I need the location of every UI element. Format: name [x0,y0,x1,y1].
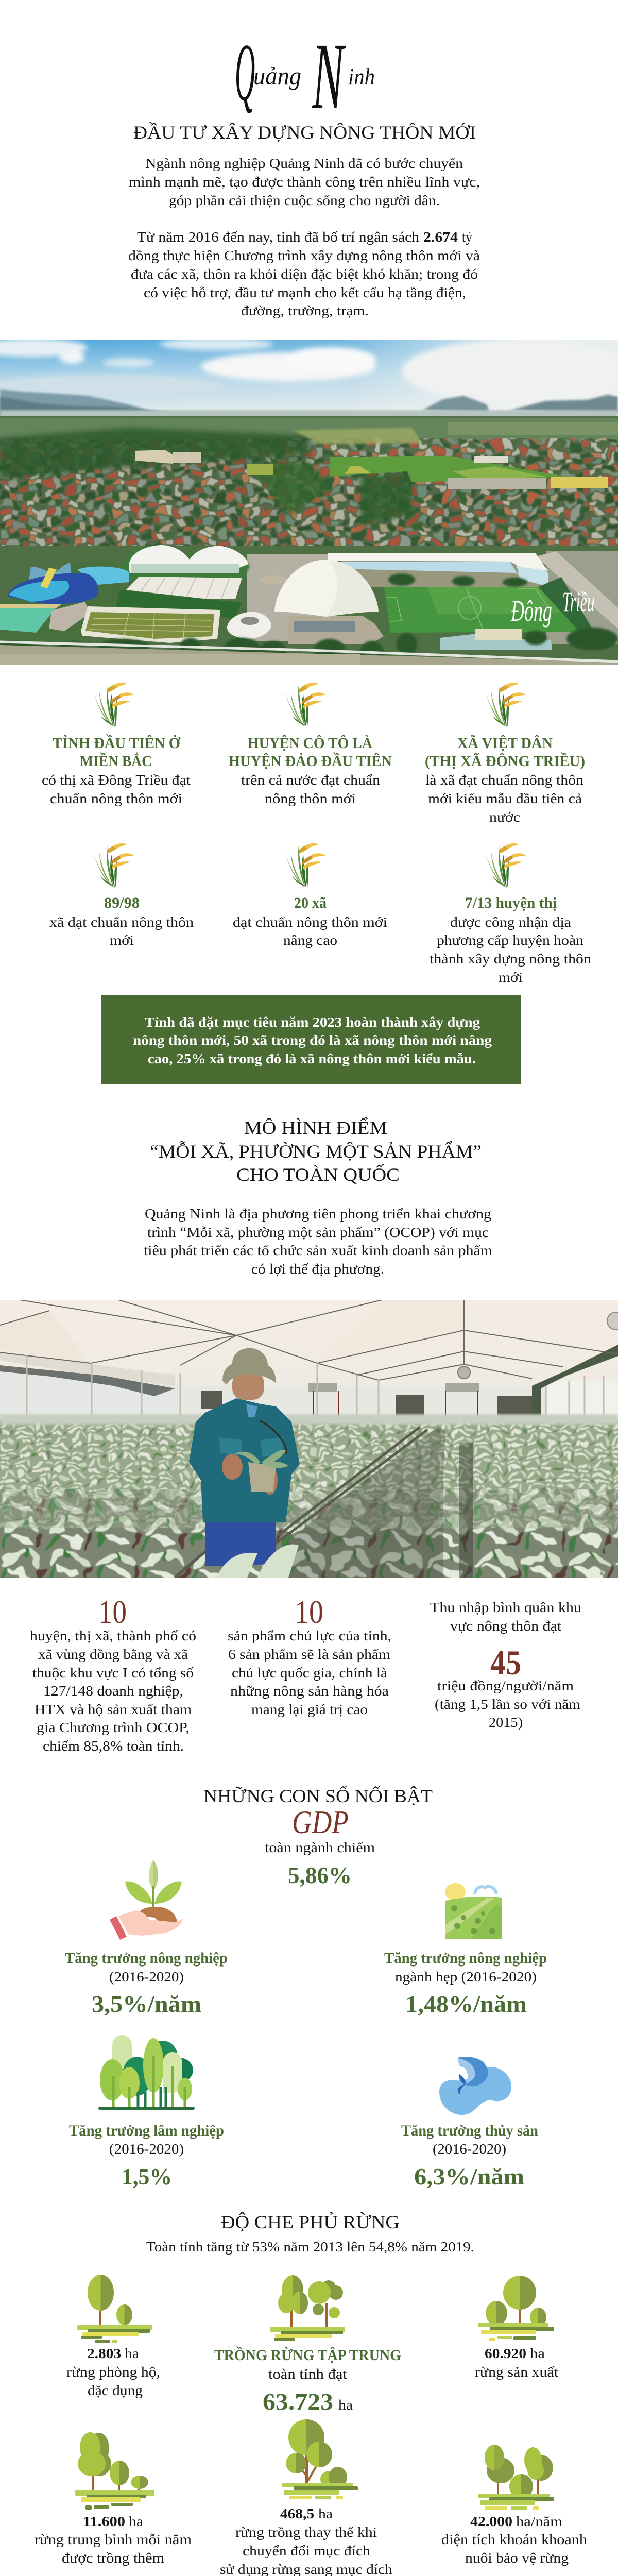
stat: 11.600 ha: được trồng thêm [62,2550,164,2566]
stat: rural income 45 million: triệu đồng/người/năm [437,1677,574,1693]
stat: 10 districts: huyện, thị xã, thành phố có [30,1628,196,1643]
stat: rural income 45 million: 2015) [489,1714,523,1730]
title signature: Quảng Ninh: inh [348,63,375,90]
stat: 20 communes: đạt chuẩn nông thôn mới [233,914,387,930]
callout: 2023 target: nông thôn mới, 50 xã trong đó là xã nông thôn mới nâng [133,1032,492,1048]
stat: rural income 45 million: 45 [490,1643,521,1682]
stat: GDP share: 5,86% [288,1862,352,1888]
intro text: góp phần cải thiện cuộc sống cho người dân. [169,192,440,208]
stat: 89/98 communes: xã đạt chuẩn nông thôn [49,914,194,930]
stat: narrow agriculture growth: ngành hẹp (2016-2020) [395,1969,537,1985]
stat: 63.723 ha: 63.723 [263,2389,333,2415]
heading: OCOP model: MÔ HÌNH ĐIỂM [244,1117,387,1138]
intro text: đồng thực hiện Chương trình xây dựng nông thôn mới và [128,247,480,263]
icon: plant in hand [110,1860,183,1940]
icon: rice stalk [285,683,325,727]
stat: rural income 45 million: vực nông thôn đạt [450,1618,561,1634]
icon: rice stalk [285,843,325,888]
icon: trees [75,2432,154,2510]
stat: narrow agriculture growth: Tăng trưởng nông nghiệp [384,1950,547,1967]
icon: trees [478,2445,554,2510]
stat: forestry growth: Tăng trưởng lâm nghiệp [69,2123,224,2139]
text: OCOP programme: trình “Mỗi xã, phường một sản phẩm” (OCOP) với mục [147,1224,489,1240]
stat: 60.920 ha: 60.920 [485,2345,526,2361]
stat: 10 districts: xã vùng đồng bằng và xã [38,1646,188,1662]
stat: rural income 45 million [430,1599,581,1730]
stat: 468,5 ha: ha [318,2505,333,2521]
title signature: Quảng Ninh: N [312,24,346,129]
achievement: Việt Dân commune: XÃ VIỆT DÂN [457,735,553,752]
stat: 11.600 ha [35,2513,192,2566]
stat: 10 key products: sản phẩm chủ lực của tỉnh, [228,1628,391,1643]
text: OCOP programme: tiêu phát triển các tổ chức sản xuất kinh doanh sản phẩm [144,1242,492,1258]
stat: 7/13 districts: được công nhận địa [450,914,571,930]
achievement: first northern province: có thị xã Đông Triều đạt [42,772,191,788]
callout: 2023 target: cao, 25% xã trong đó là xã nông thôn mới kiểu mẫu. [148,1050,476,1066]
stat: 10 districts: thuộc khu vực I có tổng số [32,1665,194,1681]
stat: 10 districts: chiếm 85,8% toàn tỉnh. [43,1738,184,1754]
text: OCOP programme [144,1206,492,1277]
stat: 7/13 districts: phương cấp huyện hoàn [437,932,583,948]
intro text [128,155,480,318]
stat: 11.600 ha: rừng trung bình mỗi năm [35,2531,192,2547]
stat: rural income 45 million: Thu nhập bình quân khu [430,1599,581,1615]
stat: forestry growth: (2016-2020) [109,2141,184,2157]
stat: agriculture growth: (2016-2020) [109,1969,184,1985]
heading: OCOP model: CHO TOÀN QUỐC [236,1164,400,1185]
stat: fishery growth: Tăng trưởng thủy sản [401,2123,538,2139]
stat: 468,5 ha: chuyển đổi mục đích [243,2543,370,2558]
intro text: tỷ [462,229,472,245]
panel: agriculture growth [65,1860,228,2017]
stat: GDP share [265,1804,375,1888]
stat: forestry growth [69,2123,224,2190]
title signature: Quảng Ninh: uảng [253,61,301,90]
stat: 63.723 ha: TRỒNG RỪNG TẬP TRUNG [214,2346,401,2364]
achievement: Cô Tô district: HUYỆN CÔ TÔ LÀ [248,735,373,752]
icon: trees [270,2275,345,2341]
achievement: Cô Tô district [229,735,392,806]
panel: protection forest [66,2275,160,2398]
stat: 10 key products: những nông sản hàng hóa [230,1683,389,1699]
stat: 42.000 ha/năm [441,2513,587,2566]
icon: fish in pond [439,2057,511,2115]
icon: rice stalk [485,843,526,888]
stat: GDP share: GDP [292,1804,349,1840]
stat: 63.723 ha [214,2346,401,2415]
panel: fishery growth [401,2057,538,2190]
stat: agriculture growth: 3,5%/năm [92,1991,201,2017]
stat: 11.600 ha: 11.600 [83,2513,125,2529]
stat: 468,5 ha: rừng trồng thay thế khi [235,2524,377,2540]
text: OCOP programme: có lợi thế địa phương. [251,1261,384,1277]
stat: 7/13 districts: mới [499,969,523,985]
intro text: đường, trường, trạm. [241,302,369,318]
title signature: Quảng Ninh [235,24,375,129]
stat: 10 districts: gia Chương trình OCOP, [37,1719,190,1735]
panel: OCOP key figures [30,1594,581,1754]
stat: 10 key products: 6 sản phẩm sẽ là sản phẩm [228,1646,390,1662]
stat: agriculture growth [65,1950,228,2017]
panel: protected forest area [441,2445,587,2566]
stat: 89/98 communes: 89/98 [104,895,140,911]
achievement: Cô Tô district: nông thôn mới [265,790,356,806]
intro text: đưa các xã, thôn ra khỏi diện đặc biệt khó khăn; trong đó [131,266,478,282]
icon: forest [98,2035,195,2110]
stat: 468,5 ha: 468,5 [280,2505,314,2521]
intro text: 2.674 [423,229,458,245]
stat: 10 key products: mang lại giá trị cao [251,1701,368,1717]
heading: những con số nổi bật: NHỮNG CON SỐ NỔI BẬT [203,1785,433,1806]
stat: 60.920 ha [475,2345,558,2380]
achievement: Cô Tô district: HUYỆN ĐẢO ĐẦU TIÊN [229,752,392,770]
callout: 2023 target: Tỉnh đã đặt mục tiêu năm 2023 hoàn thành xây dựng [145,1014,480,1030]
stat: 10 districts [30,1594,196,1754]
stat: 2.803 ha: ha [125,2345,139,2361]
intro text: Ngành nông nghiệp Quảng Ninh đã có bước chuyển [145,155,463,171]
intro text: mình mạnh mẽ, tạo được thành công trên nhiều lĩnh vực, [129,174,480,190]
stat: 10 key products: chủ lực quốc gia, chính là [232,1665,387,1681]
intro text: Từ năm 2016 đến nay, tỉnh đã bố trí ngân sách [137,229,419,245]
stat: forestry growth: 1,5% [122,2164,172,2190]
stat: 89/98 communes: mới [110,932,134,948]
heading: OCOP model: “MỖI XÃ, PHƯỜNG MỘT SẢN PHẨM” [150,1141,482,1162]
stat: 10 districts: 127/148 doanh nghiệp, [43,1683,183,1699]
achievement: Việt Dân commune [425,735,585,825]
stat: rural income 45 million: (tăng 1,5 lần so với năm [435,1696,580,1712]
stat: 2.803 ha [66,2345,160,2398]
photo: farmer in orchid greenhouse [0,1300,618,1595]
stat: 2.803 ha: rừng phòng hộ, [66,2364,160,2380]
stat: 60.920 ha: rừng sản xuất [475,2364,558,2380]
achievement: Việt Dân commune: (THỊ XÃ ĐÔNG TRIỀU) [425,752,585,770]
achievement: first northern province [42,734,191,806]
stat: 10 districts: 10 [98,1594,127,1630]
heading: độ che phủ rừng: Toàn tỉnh tăng từ 53% năm 2013 lên 54,8% năm 2019. [146,2239,474,2255]
stat: 63.723 ha: ha [338,2397,353,2413]
stat: 11.600 ha: ha [129,2513,143,2529]
panel: second achievements row [49,843,591,985]
stat: 42.000 ha/năm: 42.000 [470,2513,512,2529]
stat: narrow agriculture growth [384,1950,547,2017]
panel: replacement forest [220,2419,392,2576]
achievement: Việt Dân commune: nước [489,809,520,825]
stat: 20 communes: 20 xã [294,895,327,911]
stat: 10 key products [228,1594,391,1717]
stat: 20 communes: nâng cao [283,932,337,948]
stat: 7/13 districts: thành xây dựng nông thôn [430,951,591,967]
icon: green field [445,1883,502,1939]
icon: rice stalk [93,843,134,888]
heading: độ che phủ rừng: ĐỘ CHE PHỦ RỪNG [221,2212,400,2232]
icon: rice stalk [485,683,526,727]
icon: trees [282,2419,358,2499]
stat: 2.803 ha: 2.803 [87,2345,121,2361]
stat: GDP share: toàn ngành chiếm [265,1839,375,1855]
farmer [189,1348,300,1566]
caption signature: Đông Triều [511,590,594,628]
stat: 42.000 ha/năm: nuôi bảo vệ rừng [465,2550,569,2566]
panel: yearly planting [35,2432,192,2566]
achievement: first northern province: TỈNH ĐẦU TIÊN Ở [53,734,181,752]
callout: 2023 target [101,995,521,1084]
stat: 89/98 communes [49,895,194,948]
stat: fishery growth: 6,3%/năm [414,2164,524,2190]
panel: forestry growth [69,2035,224,2190]
achievement: first northern province: MIỀN BẮC [80,752,152,770]
stat: agriculture growth: Tăng trưởng nông nghiệp [65,1950,228,1967]
panel: concentrated reforestation [214,2275,401,2415]
stat: 42.000 ha/năm: diện tích khoán khoanh [441,2531,587,2547]
caption signature: Đông Triều: Triều [562,587,595,617]
title signature: Quảng Ninh: Q [235,27,255,118]
stat: 7/13 districts [430,895,591,985]
stat: 7/13 districts: 7/13 huyện thị [465,895,557,911]
icon: trees [478,2276,554,2341]
heading: OCOP model [150,1117,482,1185]
heading: đầu tư xây dựng nông thôn mới: ĐẦU TƯ XÂY DỰNG NÔNG THÔN MỚI [133,122,476,143]
panel: first achievements row [42,683,585,825]
achievement: Việt Dân commune: là xã đạt chuẩn nông thôn [425,772,583,788]
intro text: có việc hỗ trợ, đầu tư mạnh cho kết cấu hạ tầng điện, [144,284,466,300]
stat: fishery growth: (2016-2020) [433,2141,506,2157]
icon: rice stalk [93,683,134,727]
stat: 10 key products: 10 [295,1594,323,1630]
caption signature: Đông Triều: Đông [510,595,552,628]
stat: 468,5 ha [220,2505,392,2576]
stat: 60.920 ha: ha [530,2345,545,2361]
stat: fishery growth [401,2123,538,2190]
photo: aerial view of Đông Triều [0,338,618,668]
text: OCOP programme: Quảng Ninh là địa phương tiên phong triển khai chương [145,1206,491,1222]
heading: độ che phủ rừng [146,2212,474,2255]
stat: 42.000 ha/năm: ha/năm [516,2513,562,2529]
stat: 63.723 ha: toàn tỉnh đạt [268,2366,347,2382]
panel: narrow agriculture growth [384,1883,547,2017]
achievement: Việt Dân commune: mới kiểu mẫu đầu tiên cả [428,790,582,806]
stat: 2.803 ha: đặc dụng [88,2382,143,2398]
achievement: first northern province: chuẩn nông thôn mới [50,790,182,806]
panel: production forest [475,2276,558,2380]
stat: narrow agriculture growth: 1,48%/năm [405,1991,527,2017]
icon: trees [77,2275,152,2343]
stat: 20 communes [233,895,387,948]
stat: 10 districts: HTX và hộ sản xuất tham [35,1701,192,1717]
achievement: Cô Tô district: trên cả nước đạt chuẩn [241,772,380,788]
